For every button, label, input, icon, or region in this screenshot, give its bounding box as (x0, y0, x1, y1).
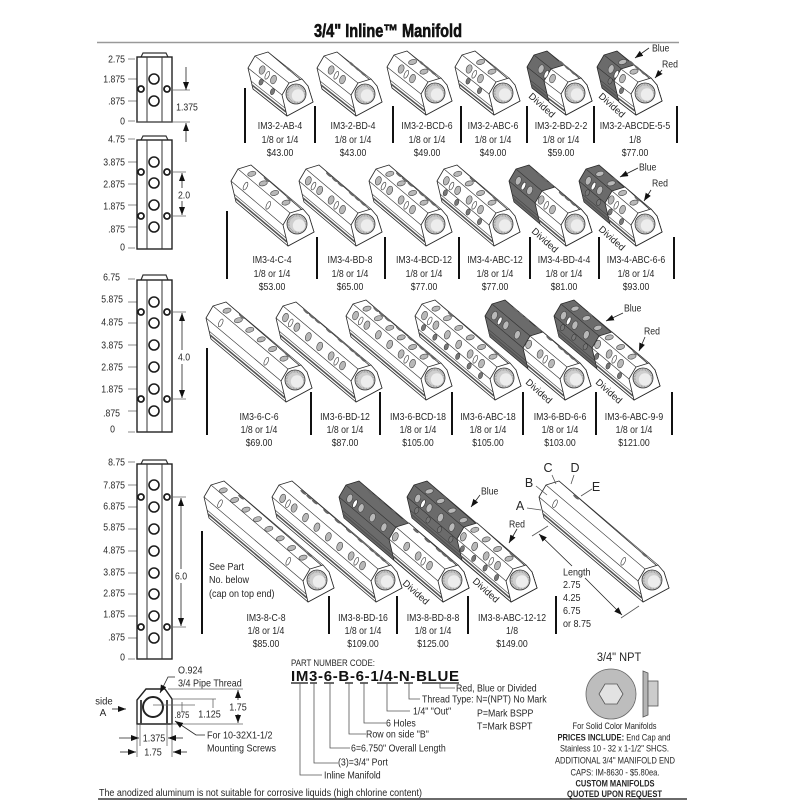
callout: blue and red, row 1: Blue (652, 43, 669, 54)
dimension drawing: 6.75 inch block: 3.875 (101, 340, 123, 351)
product: IM3-6-ABC-18: 1/8 or 1/4 (470, 424, 506, 435)
callout: blue and red, row 3: Red (644, 326, 660, 337)
product: IM3-8-BD-16: 1/8 or 1/4 (345, 625, 381, 636)
dimension drawing: 4.75 inch block: 0 (120, 242, 125, 253)
end section drawing with dimensions: O.924 (178, 665, 202, 677)
product: IM3-6-BD-12: IM3-6-BD-12 (320, 411, 370, 422)
product: IM3-4-ABC-6-6: $93.00 (623, 281, 649, 292)
diagram: manifold side letters and length: 6.75 (563, 606, 581, 617)
diagram: manifold side letters and length: A (516, 499, 525, 513)
product: IM3-2-BD-2-2: $59.00 (548, 147, 574, 158)
dimension drawing: 8.75 inch block: 7.875 (103, 480, 125, 491)
part number code explanation: Row on side "B" (366, 728, 429, 740)
dimension drawing: 4.75 inch block (103, 134, 190, 253)
product: IM3-4-BD-8 (299, 165, 382, 292)
dimension drawing: 6.75 inch block: 2.875 (101, 362, 123, 373)
dimension drawing: 8.75 inch block: .875 (108, 632, 125, 643)
product: IM3-6-BD-6-6: Divided (523, 377, 554, 406)
part number code explanation: 1/4" "Out" (413, 705, 451, 717)
diagram: manifold side letters and length (516, 461, 669, 630)
end cap: 3/4 NPT: 3/4" NPT (597, 652, 641, 664)
product: IM3-6-ABC-9-9: Divided (593, 377, 624, 406)
dimension drawing: 6.75 inch block: 4.875 (101, 317, 123, 328)
product: IM3-4-C-4: $53.00 (259, 281, 285, 292)
callout: blue and red, row 4: Red (509, 519, 525, 530)
product: IM3-6-C-6: 1/8 or 1/4 (241, 424, 277, 435)
product: IM3-2-ABC-6 (455, 51, 520, 158)
footnote: The anodized aluminum is not suitable for corrosive liquids (high chlorine content) (99, 788, 422, 799)
end section drawing with dimensions: 3/4 Pipe Thread (178, 678, 242, 690)
dimension drawing: 8.75 inch block: 6.875 (103, 501, 125, 512)
dimension drawing: 4.75 inch block: 2.0 (178, 190, 190, 201)
pricing notes: QUOTED UPON REQUEST (567, 789, 662, 800)
product: IM3-2-BD-4: 1/8 or 1/4 (335, 134, 371, 145)
diagram: manifold side letters and length: 2.75 (563, 580, 581, 591)
end section drawing with dimensions: A (100, 708, 107, 719)
pricing notes: CUSTOM MANIFOLDS (576, 778, 654, 790)
dimension drawing: 6.75 inch block: .875 (103, 408, 120, 419)
product: IM3-4-BD-4-4 (509, 165, 592, 292)
product: IM3-2-BD-2-2: Divided (526, 91, 557, 120)
end section drawing with dimensions: 1.75 (229, 702, 247, 714)
product: IM3-6-BCD-18 (346, 300, 452, 448)
diagram: manifold side letters and length: E (592, 480, 600, 494)
diagram: manifold side letters and length: Length (563, 567, 590, 579)
dimension drawing: 4.75 inch block: 2.875 (103, 179, 125, 190)
pricing notes: CAPS: IM-8630 - $5.80ea. (570, 768, 660, 778)
product: IM3-6-ABC-9-9: $121.00 (618, 437, 650, 448)
pricing notes (555, 721, 675, 800)
part number code explanation: (3)=3/4" Port (338, 756, 388, 768)
dimension drawing: 8.75 inch block: 8.75 (108, 457, 125, 468)
product: IM3-4-BD-4-4: IM3-4-BD-4-4 (538, 254, 590, 265)
product: IM3-4-ABC-12: $77.00 (482, 281, 508, 292)
callout: blue and red, row 2: Blue (639, 162, 656, 173)
product: IM3-4-BD-8: 1/8 or 1/4 (332, 268, 368, 279)
product: IM3-8-ABC-12-12: $149.00 (496, 638, 528, 649)
diagram: manifold side letters and length: D (570, 461, 580, 475)
product: IM3-6-ABC-9-9: 1/8 or 1/4 (616, 424, 652, 435)
dimension drawing: 2.75 inch block: 2.75 (108, 54, 125, 65)
product: IM3-6-ABC-9-9 (554, 300, 663, 448)
callout: blue and red, row 3: Blue (624, 303, 641, 314)
callout: blue and red, row 1 (635, 43, 678, 78)
dimension drawing: 6.75 inch block (101, 272, 190, 435)
product: IM3-8-BD-16: IM3-8-BD-16 (338, 612, 388, 623)
product: IM3-2-ABCDE-5-5: IM3-2-ABCDE-5-5 (600, 120, 670, 131)
product: IM3-2-BD-2-2: IM3-2-BD-2-2 (535, 120, 587, 131)
dimension drawing: 2.75 inch block: 1.375 (176, 102, 198, 113)
part number code explanation: PART NUMBER CODE: (291, 658, 375, 669)
product: IM3-6-ABC-18: $105.00 (472, 437, 504, 448)
part number code explanation: IM3-6-B-6-1/4-N-BLUE (291, 668, 459, 685)
dimension drawing: 2.75 inch block: 0 (120, 116, 125, 127)
product: IM3-4-ABC-6-6: Divided (596, 224, 627, 253)
product: IM3-2-BD-2-2 (526, 51, 592, 158)
product: IM3-8-BD-16 (272, 481, 402, 649)
callout: blue and red, row 1: Red (662, 59, 678, 70)
dimension drawing: 4.75 inch block: .875 (108, 224, 125, 235)
note: see part number below: (cap on top end) (209, 589, 274, 600)
part number code explanation: 6=6.750" Overall Length (351, 742, 446, 754)
end section drawing with dimensions: 1.75 (144, 747, 162, 759)
dimension drawing: 4.75 inch block: 3.875 (103, 157, 125, 168)
product: IM3-2-BCD-6: IM3-2-BCD-6 (401, 120, 453, 131)
note: see part number below (209, 562, 274, 600)
product: IM3-4-ABC-12 (437, 165, 523, 292)
product: IM3-8-BD-8-8: $125.00 (417, 638, 449, 649)
product: IM3-2-AB-4: 1/8 or 1/4 (262, 134, 298, 145)
end section drawing with dimensions: side (95, 696, 113, 708)
callout: blue and red, row 2: Red (652, 178, 668, 189)
product: IM3-2-ABCDE-5-5 (596, 51, 670, 158)
product: IM3-4-ABC-12: 1/8 or 1/4 (477, 268, 513, 279)
callout: blue and red, row 2 (620, 162, 668, 201)
end section drawing with dimensions: 1.125 (198, 709, 221, 721)
product: IM3-8-BD-8-8: IM3-8-BD-8-8 (407, 612, 459, 623)
product: IM3-8-BD-8-8: Divided (400, 578, 431, 607)
product: IM3-6-BD-12: $87.00 (332, 437, 358, 448)
product: IM3-4-BD-8: IM3-4-BD-8 (328, 254, 372, 265)
product: IM3-8-BD-8-8: 1/8 or 1/4 (415, 625, 451, 636)
product: IM3-4-ABC-12: IM3-4-ABC-12 (467, 254, 523, 265)
product: IM3-6-BD-12 (276, 302, 382, 448)
product: IM3-2-BD-4: $43.00 (340, 147, 366, 158)
product: IM3-8-BD-8-8 (339, 481, 469, 649)
product: IM3-2-ABC-6: $49.00 (480, 147, 506, 158)
note: see part number below: No. below (209, 575, 249, 586)
dimension drawing: 2.75 inch block: .875 (108, 96, 125, 107)
callout: blue and red, row 4 (471, 486, 525, 543)
part number code explanation: Inline Manifold (324, 769, 381, 781)
diagram: manifold side letters and length: C (543, 461, 553, 475)
pricing notes: PRICES INCLUDE: End Cap and (558, 732, 670, 744)
product: IM3-4-ABC-6-6 (579, 165, 665, 292)
product: IM3-6-BCD-18: IM3-6-BCD-18 (390, 411, 446, 422)
product: IM3-2-AB-4: $43.00 (267, 147, 293, 158)
product: IM3-2-ABC-6: 1/8 or 1/4 (475, 134, 511, 145)
product: IM3-2-BD-4: IM3-2-BD-4 (331, 120, 375, 131)
product: IM3-6-BD-6-6: IM3-6-BD-6-6 (534, 411, 586, 422)
end section drawing with dimensions: .875 (175, 709, 190, 720)
diagram: manifold side letters and length: or 8.75 (563, 619, 591, 630)
product: IM3-2-BCD-6 (387, 51, 453, 158)
part number code explanation (291, 658, 547, 781)
dimension drawing: 8.75 inch block: 0 (120, 652, 125, 663)
product: IM3-2-ABCDE-5-5: Divided (596, 91, 627, 120)
product: IM3-8-ABC-12-12 (407, 481, 546, 649)
product: IM3-2-AB-4: IM3-2-AB-4 (258, 120, 302, 131)
product: IM3-4-BD-4-4: $81.00 (551, 281, 577, 292)
product: IM3-8-C-8: $85.00 (253, 638, 279, 649)
product: IM3-8-C-8 (204, 481, 334, 649)
diagram: manifold side letters and length: 4.25 (563, 593, 581, 604)
product: IM3-6-BD-6-6: 1/8 or 1/4 (542, 424, 578, 435)
product: IM3-6-BCD-18: 1/8 or 1/4 (400, 424, 436, 435)
product: IM3-2-AB-4 (248, 52, 313, 158)
product: IM3-8-C-8: IM3-8-C-8 (246, 612, 286, 623)
dimension drawing: 8.75 inch block: 3.875 (103, 567, 125, 578)
dimension drawing: 6.75 inch block: 0 (110, 424, 115, 435)
product: IM3-2-BD-2-2: 1/8 or 1/4 (543, 134, 579, 145)
product: IM3-8-C-8: 1/8 or 1/4 (248, 625, 284, 636)
product: IM3-2-ABC-6: IM3-2-ABC-6 (468, 120, 518, 131)
product: IM3-4-C-4: IM3-4-C-4 (252, 254, 292, 265)
product: IM3-6-BD-6-6 (485, 300, 591, 448)
dimension drawing: 8.75 inch block: 1.875 (103, 609, 125, 620)
dimension drawing: 8.75 inch block: 4.875 (103, 545, 125, 556)
dimension drawing: 6.75 inch block: 1.875 (101, 384, 123, 395)
product: IM3-6-BCD-18: $105.00 (402, 437, 434, 448)
product: IM3-4-BCD-12 (369, 165, 452, 292)
end section drawing with dimensions: For 10-32X1-1/2 (207, 730, 272, 742)
product: IM3-4-ABC-6-6: IM3-4-ABC-6-6 (607, 254, 665, 265)
pricing notes: ADDITIONAL 3/4" MANIFOLD END (555, 756, 675, 766)
end cap: 3/4 NPT (586, 652, 658, 719)
part number code explanation: Thread Type: N=(NPT) No Mark (422, 693, 547, 705)
dimension drawing: 4.75 inch block: 1.875 (103, 201, 125, 212)
note: see part number below: See Part (209, 562, 244, 573)
dimension drawing: 4.75 inch block: 4.75 (108, 134, 125, 145)
product: IM3-2-ABCDE-5-5: 1/8 (629, 134, 641, 145)
product: IM3-6-C-6: IM3-6-C-6 (239, 411, 279, 422)
dimension drawing: 8.75 inch block: 2.875 (103, 588, 125, 599)
dimension drawing: 6.75 inch block: 6.75 (103, 272, 120, 283)
product: IM3-4-C-4: 1/8 or 1/4 (254, 268, 290, 279)
product: IM3-4-BCD-12: IM3-4-BCD-12 (396, 254, 452, 265)
product: IM3-8-ABC-12-12: 1/8 (506, 625, 518, 636)
product: IM3-4-BCD-12: $77.00 (411, 281, 437, 292)
pricing notes: Stainless 10 - 32 x 1-1/2" SHCS. (560, 744, 669, 754)
product: IM3-4-C-4 (231, 165, 314, 292)
product: IM3-4-BD-8: $65.00 (337, 281, 363, 292)
end section drawing with dimensions: 1.375 (143, 733, 165, 745)
product: IM3-6-ABC-9-9: IM3-6-ABC-9-9 (605, 411, 663, 422)
product: IM3-6-C-6: $69.00 (246, 437, 272, 448)
dimension drawing: 6.75 inch block: 5.875 (101, 294, 123, 305)
product: IM3-2-BD-4 (317, 52, 382, 158)
part number code explanation: T=Mark BSPT (477, 720, 533, 732)
product: IM3-6-BD-12: 1/8 or 1/4 (327, 424, 363, 435)
dimension drawing: 2.75 inch block (103, 53, 198, 142)
callout: blue and red, row 4: Blue (481, 486, 498, 497)
product: IM3-4-BD-4-4: Divided (529, 226, 560, 255)
product: IM3-6-ABC-18: IM3-6-ABC-18 (460, 411, 516, 422)
product: IM3-8-ABC-12-12: IM3-8-ABC-12-12 (478, 612, 546, 623)
product: IM3-6-C-6 (206, 302, 312, 448)
end section drawing with dimensions: Mounting Screws (207, 743, 276, 755)
callout: blue and red, row 3 (606, 303, 660, 351)
product: IM3-8-BD-16: $109.00 (347, 638, 379, 649)
part number code explanation: Red, Blue or Divided (456, 682, 537, 694)
part number code explanation: P=Mark BSPP (477, 707, 533, 719)
product: IM3-2-ABCDE-5-5: $77.00 (622, 147, 648, 158)
pricing notes: For Solid Color Manifolds (572, 721, 657, 732)
dimension drawing: 6.75 inch block: 4.0 (178, 352, 190, 363)
product: IM3-6-ABC-18 (415, 300, 521, 448)
end section drawing with dimensions (95, 665, 276, 759)
diagram: manifold side letters and length: B (525, 476, 533, 490)
title: 3/4" Inline™ Manifold (314, 21, 462, 41)
product: IM3-6-BD-6-6: $103.00 (544, 437, 576, 448)
product: IM3-2-BCD-6: $49.00 (414, 147, 440, 158)
dimension drawing: 8.75 inch block: 5.875 (103, 522, 125, 533)
part number code explanation: 6 Holes (386, 717, 416, 729)
product: IM3-4-ABC-6-6: 1/8 or 1/4 (618, 268, 654, 279)
product: IM3-4-BCD-12: 1/8 or 1/4 (406, 268, 442, 279)
product: IM3-4-BD-4-4: 1/8 or 1/4 (546, 268, 582, 279)
dimension drawing: 2.75 inch block: 1.875 (103, 74, 125, 85)
product: IM3-2-BCD-6: 1/8 or 1/4 (409, 134, 445, 145)
dimension drawing: 8.75 inch block (103, 457, 187, 663)
product: IM3-8-ABC-12-12: Divided (470, 576, 501, 605)
dimension drawing: 8.75 inch block: 6.0 (175, 571, 187, 582)
